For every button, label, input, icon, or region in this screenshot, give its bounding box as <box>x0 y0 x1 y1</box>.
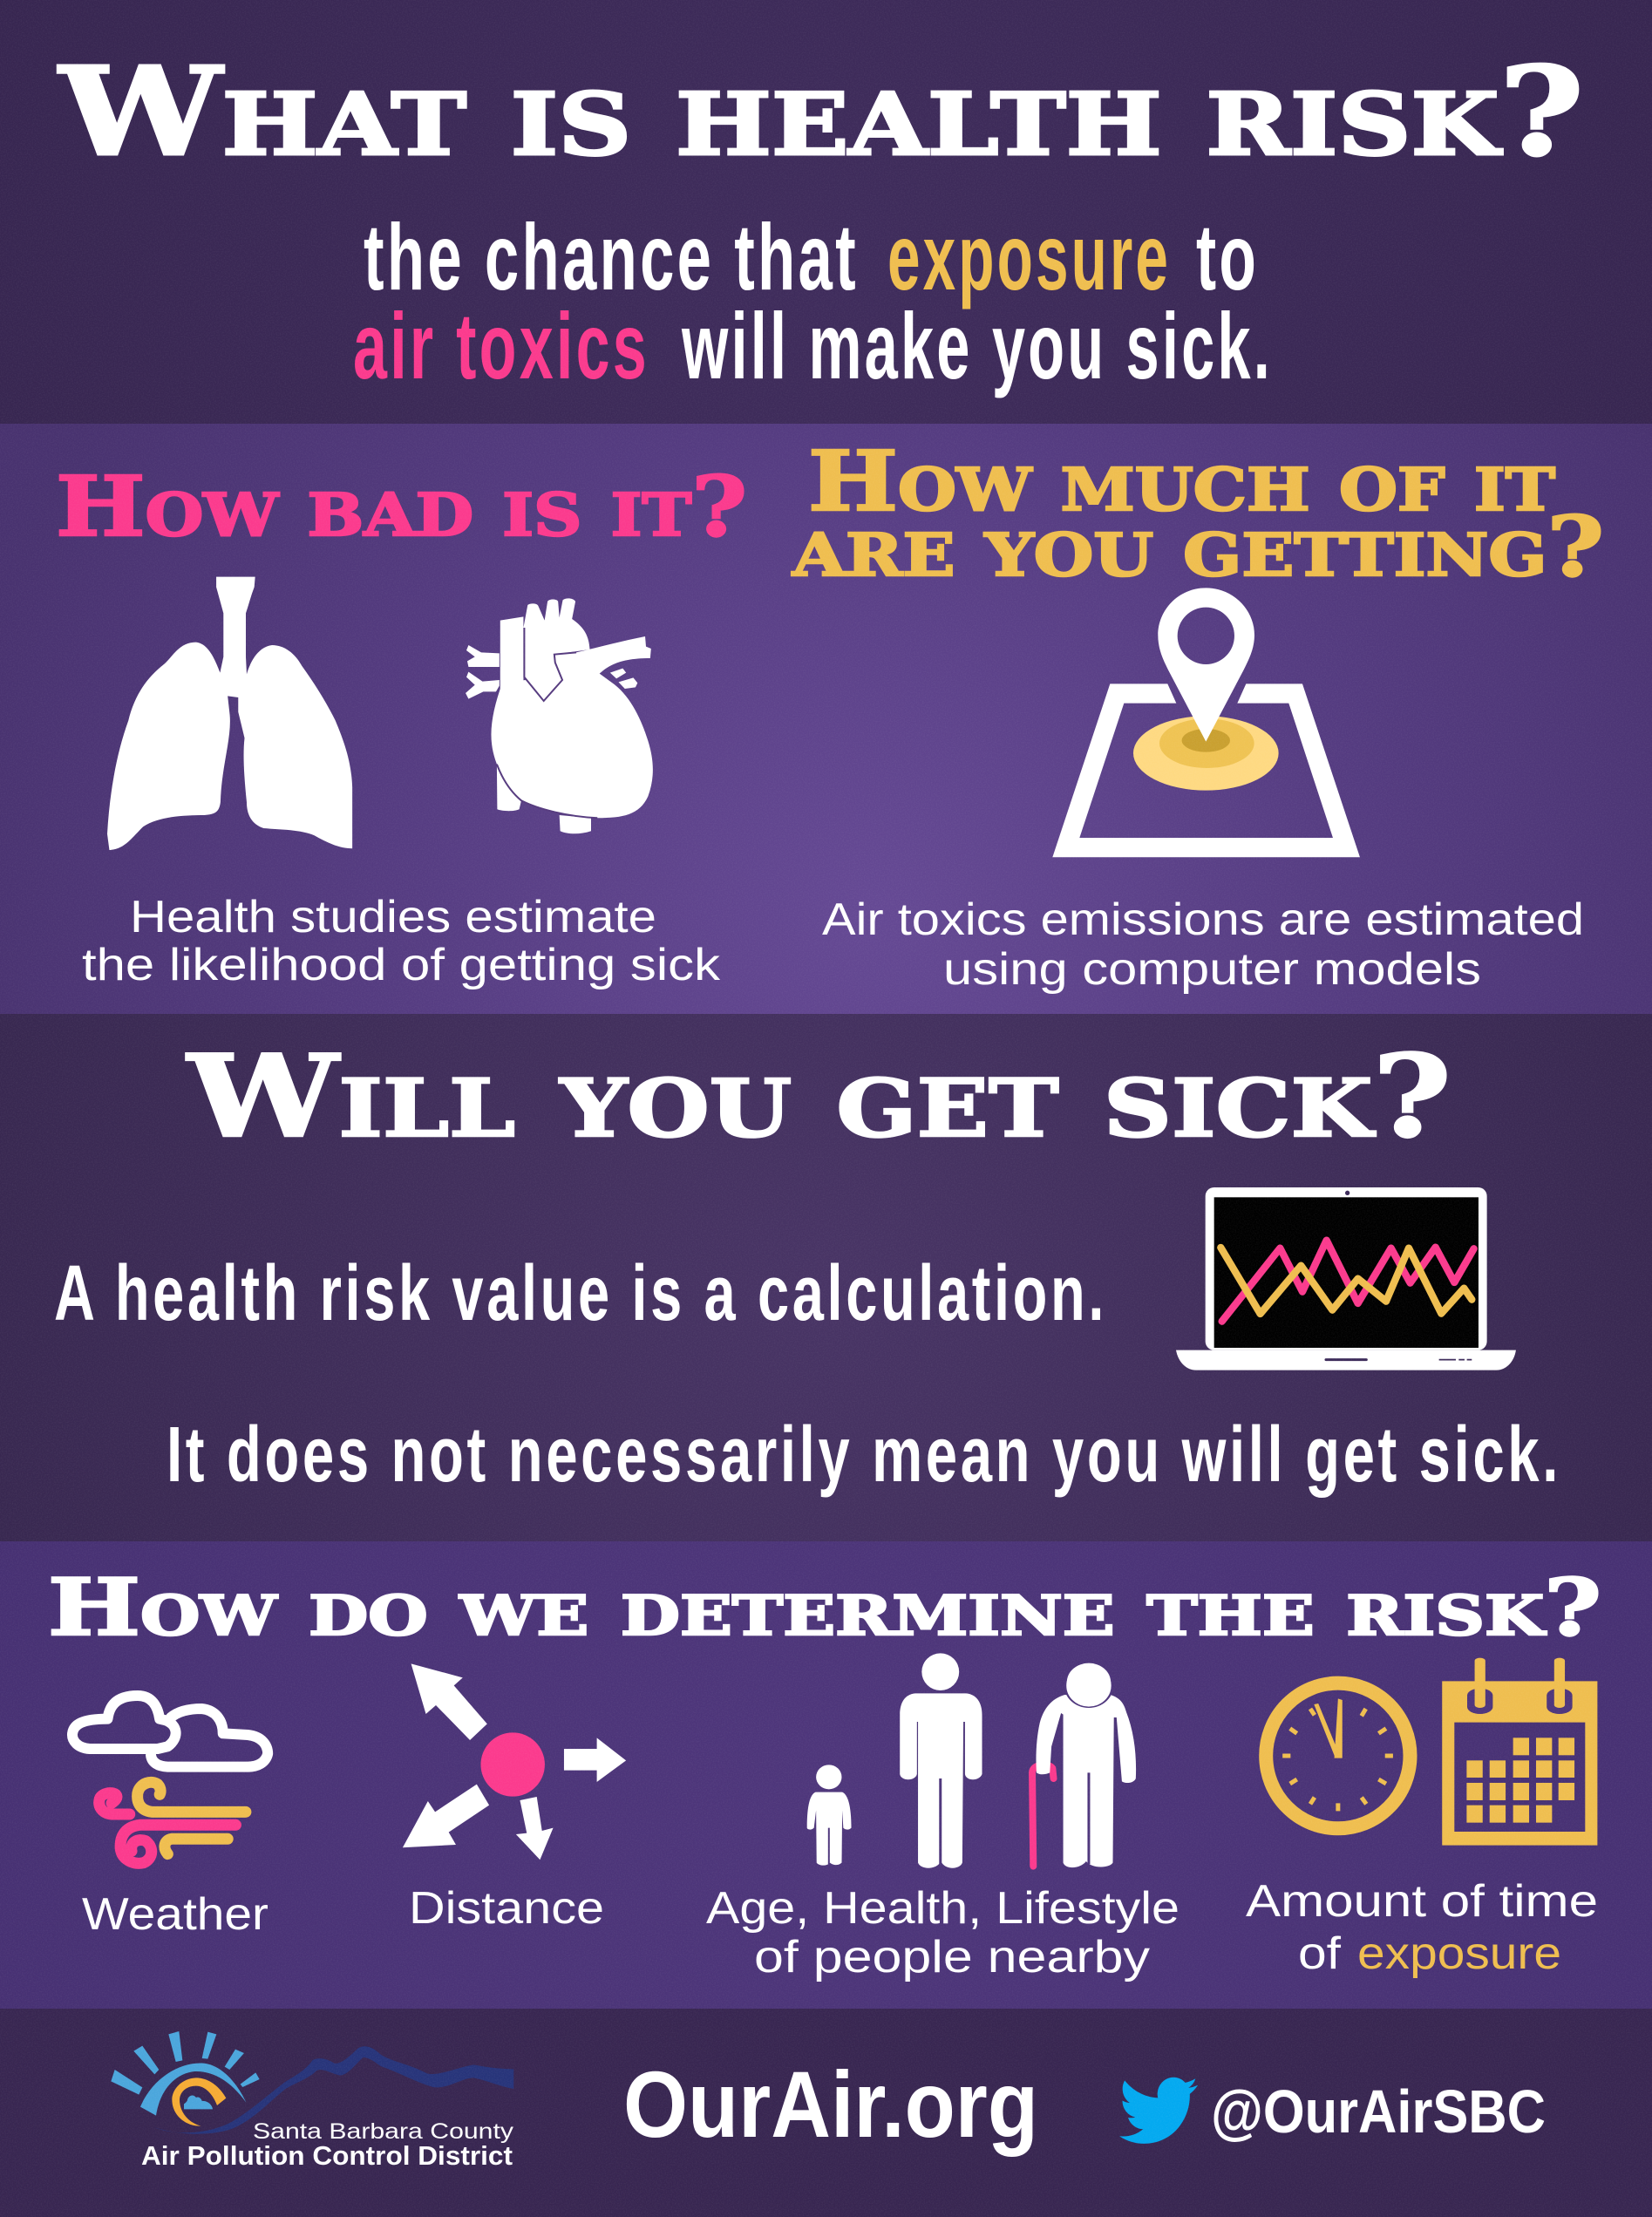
panel: will you get sick <box>0 1014 1652 1541</box>
label: amount of time of exposure: Amount of time <box>1246 1876 1598 1927</box>
heading: will you get sick: Will you get sick? <box>186 1030 1451 1163</box>
definition text: air toxics <box>353 293 649 398</box>
icon: weather clouds and wind <box>72 1696 268 1863</box>
chart line: pink <box>1222 1241 1474 1322</box>
definition text: will make you sick. <box>681 293 1273 398</box>
label: amount of time of exposure: of <box>1298 1928 1342 1979</box>
icon: distance arrows <box>403 1663 626 1860</box>
map outline <box>1052 683 1360 857</box>
adult <box>900 1653 982 1868</box>
panel background: footer band <box>0 2009 1652 2217</box>
label: distance: Distance <box>409 1883 604 1934</box>
panel: what is health risk <box>0 0 1652 424</box>
website: OurAir.org <box>623 2051 1038 2157</box>
label: age health lifestyle: Age, Health, Lifestyle <box>706 1883 1180 1934</box>
panel: hazard and exposure <box>0 424 1652 1014</box>
cane <box>1032 1765 1054 1867</box>
panel background: top dark band <box>0 0 1652 424</box>
panel background: lower light band <box>0 1541 1652 2009</box>
chart line: gold <box>1220 1248 1472 1314</box>
elder <box>1036 1663 1136 1867</box>
logo text: Air Pollution Control District <box>141 2140 513 2171</box>
child <box>807 1765 852 1866</box>
pin <box>1158 588 1254 742</box>
heading: how much of it are you getting: are you getting? <box>792 499 1604 595</box>
icon: calendar <box>1442 1658 1597 1846</box>
text: health studies: Health studies estimate <box>130 892 656 942</box>
definition text: exposure <box>887 204 1171 309</box>
twitter handle: @OurAirSBC <box>1211 2078 1546 2146</box>
icon: laptop with chart <box>1176 1187 1516 1370</box>
panel background: middle dark band <box>0 1014 1652 1541</box>
icon: people child adult elder <box>807 1653 1136 1868</box>
label: age health lifestyle: of people nearby <box>754 1932 1150 1982</box>
panel: footer <box>0 2009 1652 2217</box>
logo mark <box>111 2031 513 2134</box>
icon: map pin over exposure zone <box>1052 588 1360 857</box>
logo: Santa Barbara County APCD <box>111 2031 520 2171</box>
text: air toxics emissions: using computer models <box>943 944 1481 995</box>
label: weather: Weather <box>82 1889 269 1940</box>
title: What is health risk? <box>58 41 1584 184</box>
definition text: to <box>1196 204 1259 309</box>
text: calculation: A health risk value is a calculation. <box>54 1250 1107 1337</box>
heading: how bad is it: How bad is it? <box>56 459 747 555</box>
panel: how do we determine the risk <box>0 1541 1652 2009</box>
heading: how do we determine the risk: How do we determine the risk? <box>48 1561 1601 1654</box>
text: health studies: the likelihood of getting sick <box>82 940 721 990</box>
exposure rings <box>1133 716 1279 791</box>
definition text: the chance that <box>364 204 859 309</box>
heading: how much of it are you getting: How much of it <box>808 433 1555 530</box>
logo text: Santa Barbara County <box>253 2119 514 2144</box>
icon: clock <box>1266 1683 1410 1828</box>
text: air toxics emissions: Air toxics emissions are estimated <box>822 894 1584 945</box>
icon: heart <box>466 598 653 833</box>
label: amount of time of exposure: exposure <box>1357 1928 1561 1979</box>
icon: twitter bird <box>1119 2078 1198 2144</box>
icon: lungs <box>107 577 352 850</box>
panel background: light purple band <box>0 424 1652 1014</box>
